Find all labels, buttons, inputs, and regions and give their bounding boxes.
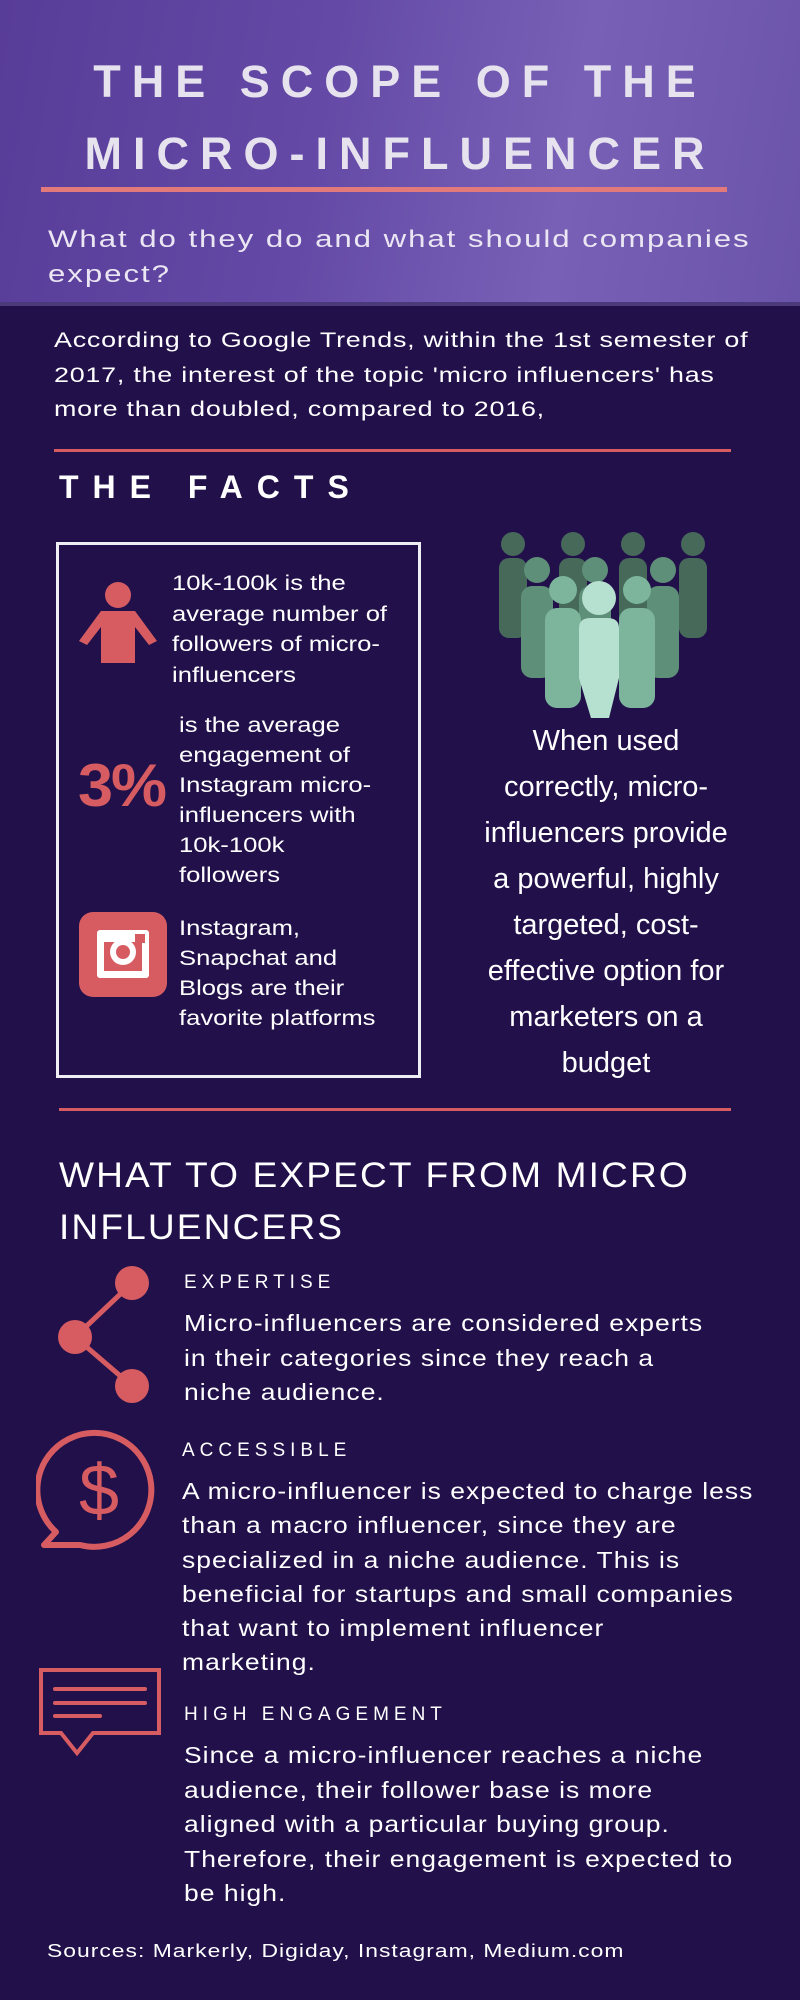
text: callout micro-influencers value: marketers on a [509, 1001, 703, 1033]
intro paragraph [54, 329, 748, 421]
text [184, 1742, 733, 1906]
text: platforms fact: Instagram, [179, 917, 300, 940]
text: in their categories since they reach a [184, 1344, 654, 1370]
text: callout micro-influencers value: correctly, micro- [504, 771, 708, 803]
text: A micro-influencer is expected to charge less [182, 1478, 753, 1504]
text: callout micro-influencers value: When used [533, 725, 679, 757]
text: be high. [184, 1880, 286, 1906]
text: engagement fact: Instagram micro- [179, 774, 371, 797]
title underline [41, 187, 727, 192]
text: that want to implement influencer [182, 1615, 604, 1641]
icon: person [79, 582, 157, 663]
text: followers fact: average number of [172, 602, 387, 626]
text: Therefore, their engagement is expected to [184, 1846, 733, 1872]
intro paragraph: 2017, the interest of the topic 'micro influencers' has [54, 364, 715, 386]
text: followers fact [172, 572, 388, 686]
intro paragraph: According to Google Trends, within the 1st semester of [54, 329, 748, 352]
text: engagement fact: followers [179, 864, 280, 887]
text: engagement fact: 10k-100k [179, 834, 284, 857]
text: platforms fact: Snapchat and [179, 947, 337, 970]
text: beneficial for startups and small companies [182, 1581, 734, 1607]
heading: what to expect: INFLUENCERS [59, 1208, 344, 1247]
section: high engagement [184, 1704, 733, 1906]
icon: dollar bubble [36, 1430, 154, 1550]
title [85, 56, 715, 179]
text: engagement fact: influencers with [179, 804, 356, 827]
text: callout micro-influencers value: a powerful, highly [493, 863, 719, 895]
text: audience, their follower base is more [184, 1776, 653, 1802]
subtitle: What do they do and what should companies [48, 226, 751, 253]
text: callout micro-influencers value: targeted, cost- [513, 909, 699, 941]
subtitle [48, 226, 751, 288]
text: followers fact: 10k-100k is the [172, 572, 346, 595]
text: platforms fact: Blogs are their [179, 977, 344, 1000]
text: engagement fact: is the average [179, 714, 340, 737]
section: accessible [182, 1440, 753, 1675]
heading: what to expect: WHAT TO EXPECT FROM MICRO [59, 1156, 690, 1195]
icon: instagram [79, 912, 167, 997]
text: than a macro influencer, since they are [182, 1512, 677, 1538]
label: HIGH ENGAGEMENT [184, 1704, 447, 1725]
icon: chat box [39, 1668, 161, 1756]
text: aligned with a particular buying group. [184, 1811, 670, 1837]
label: EXPERTISE [184, 1272, 335, 1293]
text: niche audience. [184, 1379, 385, 1405]
title: MICRO-INFLUENCER [85, 128, 715, 179]
text [182, 1478, 753, 1675]
header background [0, 0, 800, 306]
title: THE SCOPE OF THE [93, 56, 707, 107]
heading: what to expect [59, 1156, 690, 1247]
text: followers fact: followers of micro- [172, 633, 380, 656]
text: marketing. [182, 1649, 316, 1675]
text: callout micro-influencers value [484, 725, 728, 1079]
text: Micro-influencers are considered experts [184, 1310, 703, 1336]
icon: crowd of people [499, 532, 707, 718]
text: engagement fact [179, 714, 371, 887]
text: engagement fact: engagement of [179, 744, 350, 767]
text: callout micro-influencers value: influencers provide [484, 817, 728, 849]
sources: Sources: Markerly, Digiday, Instagram, Medium.com [47, 1941, 624, 1961]
text: platforms fact [179, 917, 375, 1030]
icon: dollar bubble: $ [79, 1451, 119, 1531]
section: expertise [184, 1272, 703, 1405]
text: platforms fact: favorite platforms [179, 1007, 375, 1030]
text: callout micro-influencers value: effective option for [488, 955, 724, 987]
text: specialized in a niche audience. This is [182, 1547, 680, 1573]
text [184, 1310, 703, 1405]
text: callout micro-influencers value: budget [562, 1047, 650, 1079]
heading: the facts: THE FACTS [59, 469, 363, 505]
text: Since a micro-influencer reaches a niche [184, 1742, 703, 1768]
intro paragraph: more than doubled, compared to 2016, [54, 398, 545, 421]
stat: 3%: 3% [78, 752, 165, 819]
panel: facts box [56, 542, 421, 1078]
subtitle: expect? [48, 261, 171, 288]
label: ACCESSIBLE [182, 1440, 351, 1461]
icon: share [58, 1266, 149, 1403]
text: followers fact: influencers [172, 664, 296, 686]
